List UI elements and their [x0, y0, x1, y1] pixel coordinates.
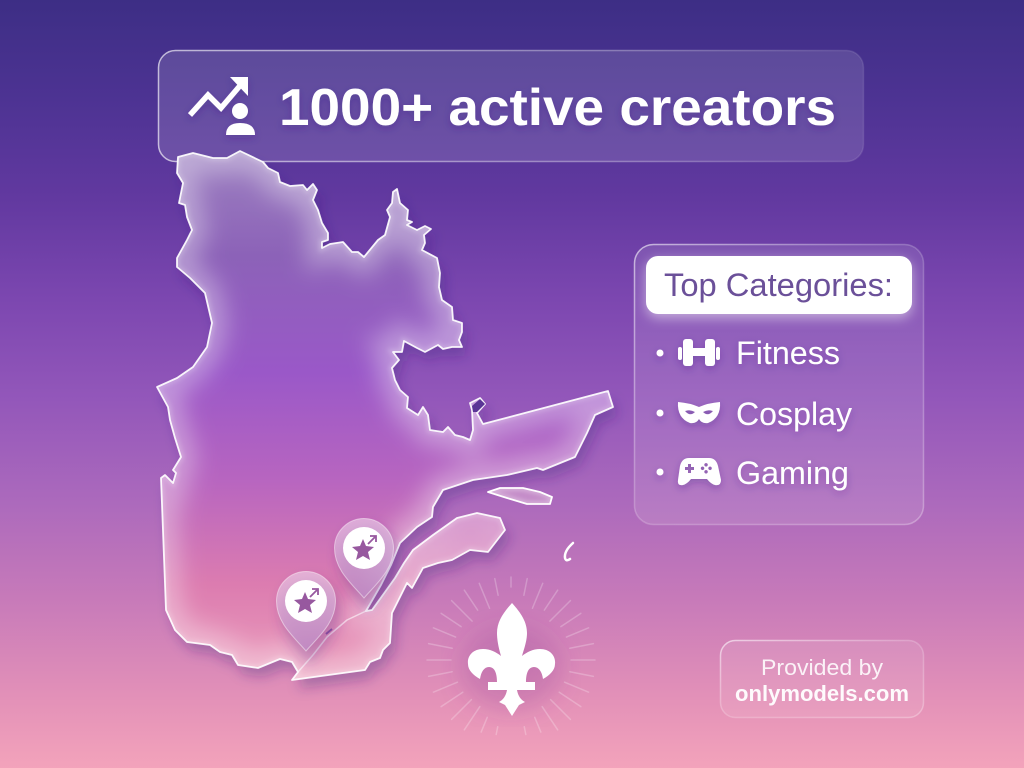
map pin: south [276, 572, 340, 665]
map inner glow [157, 151, 613, 680]
icon: mask [678, 402, 720, 423]
attribution text: Provided by [761, 655, 883, 680]
item: cosplay [656, 396, 852, 432]
emblem glow [461, 626, 561, 710]
map pin: north [334, 518, 398, 612]
item: fitness: Fitness [736, 335, 840, 371]
header pill [646, 256, 912, 314]
emblem: fleur-de-lis with rays [427, 577, 595, 735]
icon: fleur-de-lis [468, 603, 555, 716]
river sliver [326, 629, 332, 634]
header text: Top Categories: [664, 267, 893, 303]
icon: star with arrow [352, 536, 376, 560]
header glow [646, 260, 912, 318]
sunburst rays [427, 577, 595, 735]
item: gaming: Gaming [736, 455, 849, 491]
icon: trend arrow with creator [190, 77, 255, 135]
small bay [472, 399, 485, 412]
panel: attribution [720, 640, 924, 718]
map: Quebec [157, 151, 618, 689]
icon: game controller [678, 458, 721, 485]
map body [157, 151, 613, 680]
item: fitness [656, 335, 840, 371]
panel: top categories [634, 244, 924, 524]
item: cosplay: Cosplay [736, 396, 852, 432]
island: Anticosti [488, 488, 552, 504]
island: Magdalen [565, 543, 573, 560]
headline text: 1000+ active creators [279, 79, 836, 137]
icon: dumbbell [678, 339, 720, 366]
panel: headline banner [158, 50, 864, 162]
icon: star with arrow [294, 589, 318, 613]
map shadow [162, 160, 618, 689]
river line [298, 611, 366, 672]
item: gaming [656, 455, 849, 491]
map outline [157, 151, 613, 680]
panel: attribution: onlymodels.com [735, 681, 909, 706]
